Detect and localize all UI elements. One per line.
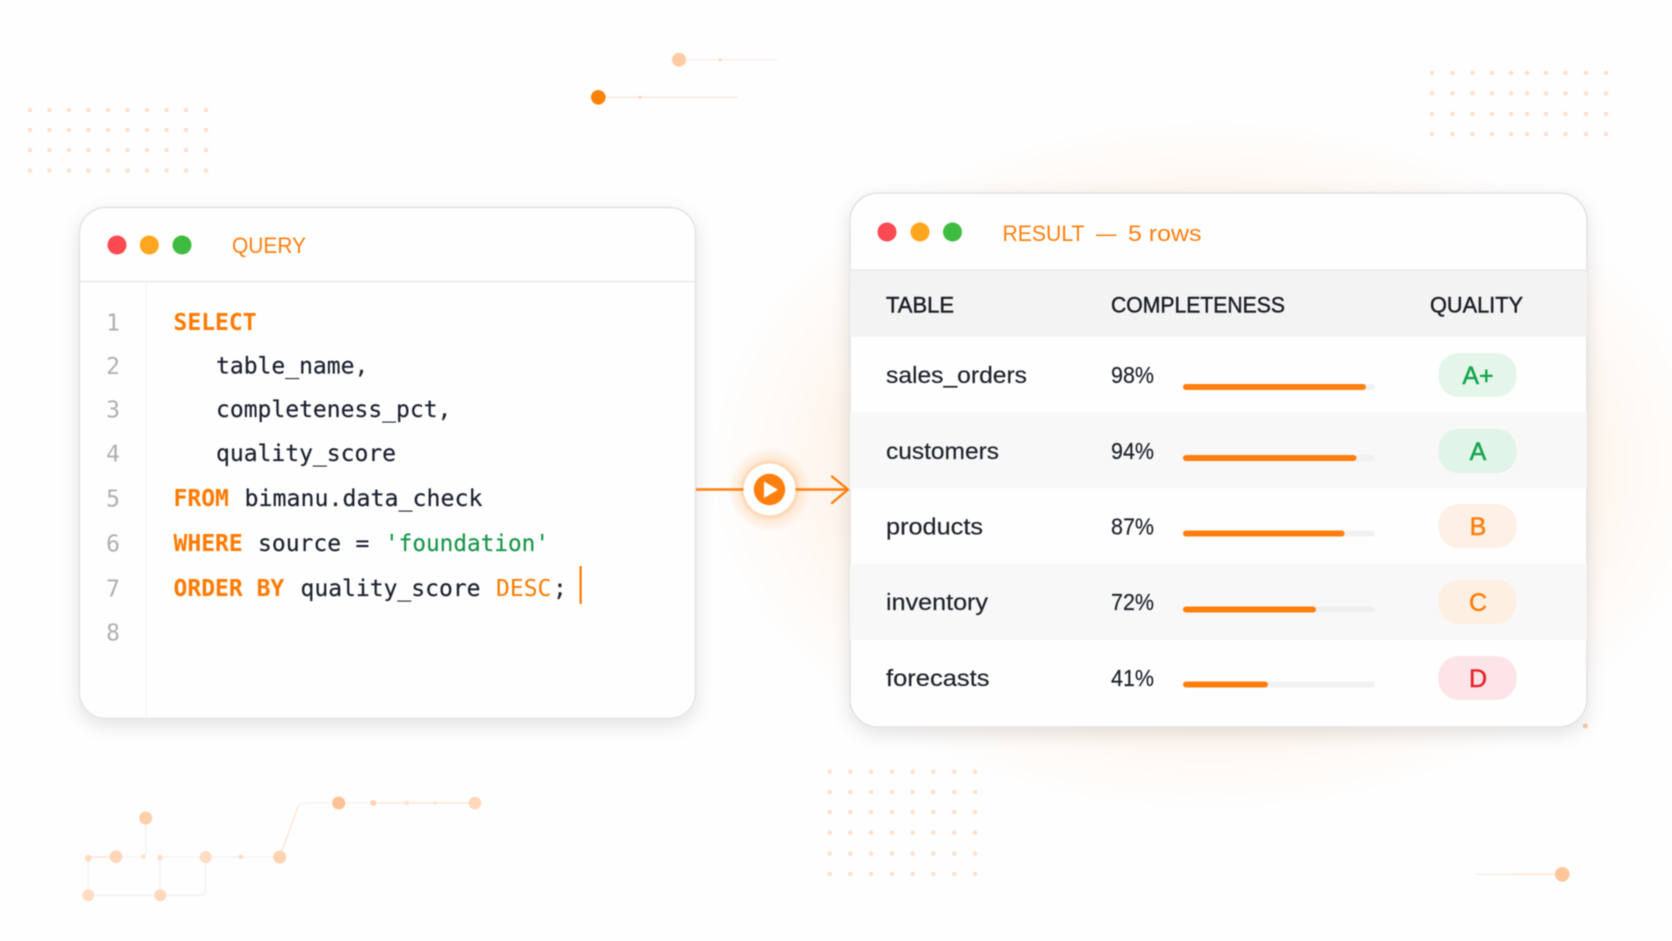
line numbers [106, 310, 120, 646]
decorative circuit network: bottom left [82, 796, 481, 901]
row: customers [886, 429, 1516, 473]
decorative node line: bottom right [1475, 724, 1588, 882]
sql code: source [258, 531, 341, 557]
table header: QUALITY [1430, 292, 1523, 318]
row: sales_orders: A+ [1462, 362, 1494, 390]
row: products: products [886, 514, 983, 540]
row: customers: A [1470, 438, 1487, 466]
dot grid: bottom centre [827, 769, 977, 876]
sql code: completeness_pct, [216, 397, 451, 423]
row: inventory: C [1469, 589, 1487, 617]
dot grid: top right [1430, 71, 1608, 136]
row: forecasts: forecasts [886, 665, 990, 691]
sql code: WHERE [174, 531, 243, 557]
line numbers: 4 [106, 442, 120, 468]
result panel title: 5 rows [1128, 221, 1202, 246]
result panel title: RESULT [1002, 221, 1085, 246]
line numbers: 3 [106, 398, 120, 424]
row: forecasts: D [1469, 665, 1487, 693]
icon: play button [728, 448, 812, 532]
sql code [174, 310, 567, 602]
arrow: query to result [696, 476, 848, 503]
query panel title: QUERY [232, 233, 306, 258]
row: customers: 94% [1111, 438, 1154, 464]
row: inventory: inventory [886, 589, 989, 615]
sql code: = [356, 531, 369, 557]
decorative node line: top [672, 53, 777, 67]
sql code: quality_score [216, 441, 396, 467]
line numbers: 1 [106, 310, 120, 336]
panel: query [80, 208, 696, 718]
sql code: FROM [174, 486, 229, 512]
line numbers: 2 [106, 354, 120, 380]
row: products: 87% [1111, 514, 1154, 540]
panel: result [850, 193, 1587, 727]
row: forecasts [886, 656, 1516, 700]
sql code: table_name, [216, 354, 368, 380]
sql code: bimanu.data_check [244, 486, 483, 512]
row: sales_orders: sales_orders [886, 362, 1027, 388]
line numbers: 7 [106, 576, 120, 602]
row: inventory [886, 580, 1516, 624]
sql code: ; [553, 576, 567, 602]
table header: COMPLETENESS [1111, 292, 1285, 318]
row: sales_orders [886, 353, 1516, 397]
sql code: DESC [496, 576, 551, 602]
row: products: B [1470, 513, 1486, 541]
sql code: ORDER BY [174, 576, 284, 602]
window controls: query [108, 236, 192, 254]
row: customers: customers [886, 438, 999, 464]
table row backgrounds [850, 270, 1587, 640]
table header: TABLE [886, 292, 954, 318]
text cursor [580, 566, 582, 604]
row: forecasts: 41% [1111, 665, 1154, 691]
orange glow behind result panel [710, 120, 1672, 810]
line numbers: 5 [106, 486, 120, 512]
row: inventory: 72% [1111, 589, 1154, 615]
table header [886, 292, 1523, 318]
sql code: SELECT [174, 310, 257, 336]
sql code: quality_score [300, 576, 481, 602]
sql code: 'foundation' [385, 531, 549, 557]
decorative node line: second top [591, 90, 738, 105]
result panel title: — [1096, 221, 1117, 246]
dot grid: top left [28, 108, 208, 173]
row: products [886, 504, 1516, 548]
line numbers: 8 [106, 620, 120, 646]
window controls: result [878, 222, 962, 242]
line numbers: 6 [106, 532, 120, 558]
row: sales_orders: 98% [1111, 362, 1154, 388]
